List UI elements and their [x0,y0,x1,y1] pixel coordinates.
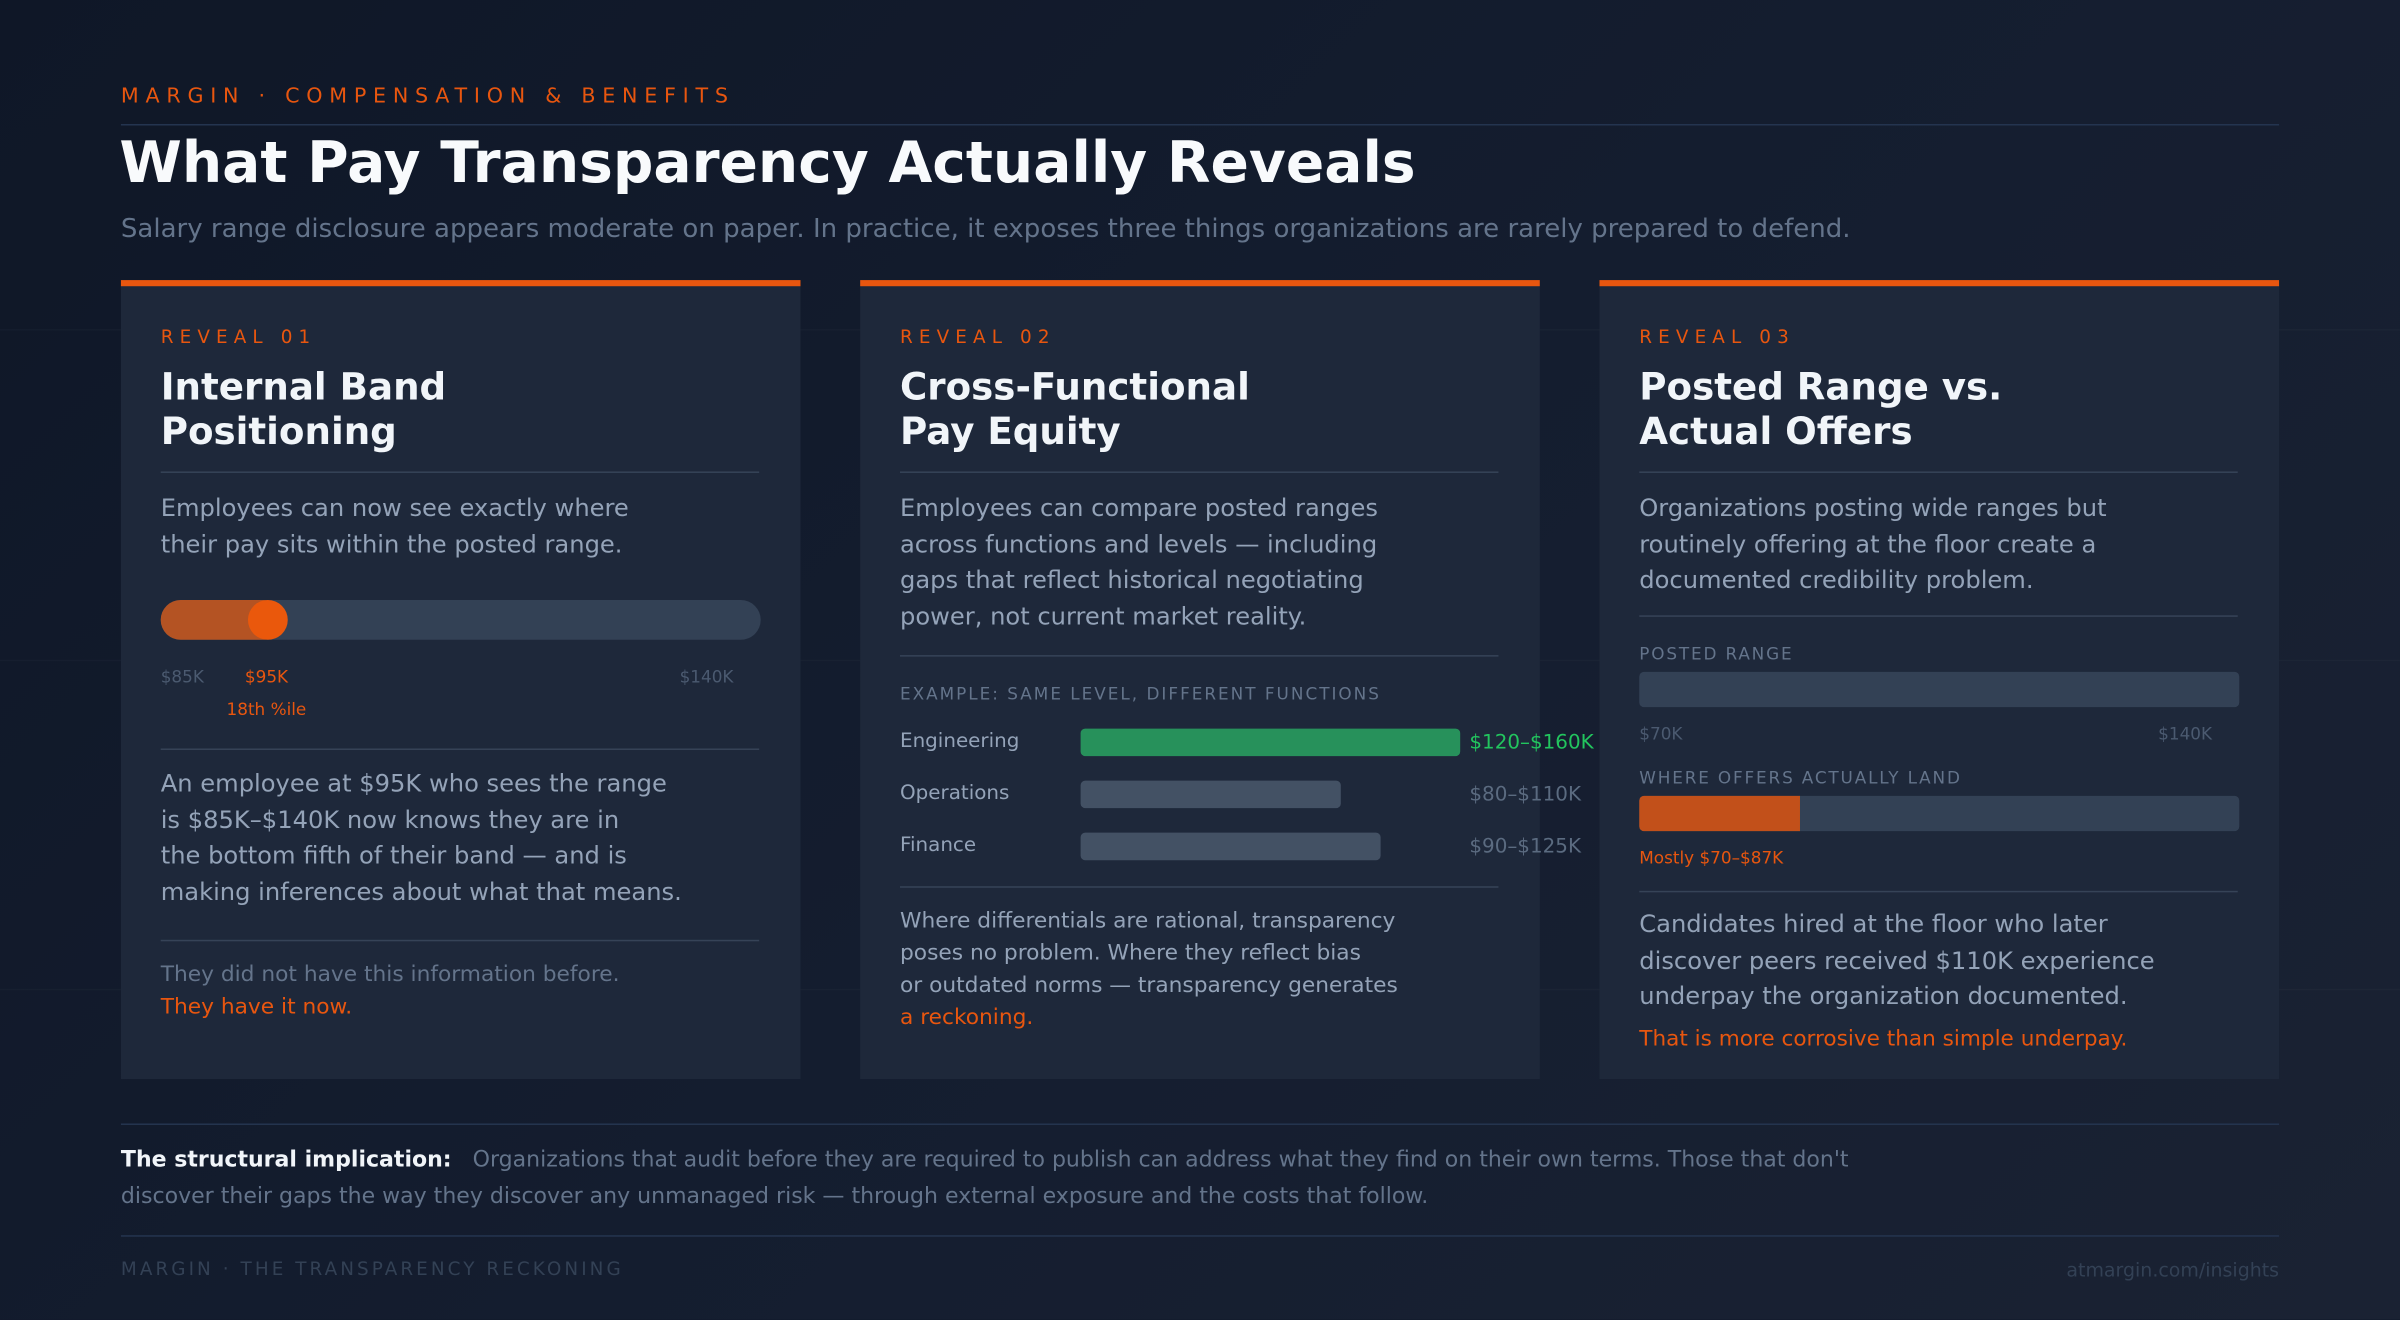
bar chart: functions: Operations [900,782,1009,805]
card title 1 [161,364,446,453]
panel: reveal 02: REVEAL 02 [900,326,1056,347]
body text 3: Organizations posting wide ranges but [1639,493,2107,522]
body text 2: gaps that reflect historical negotiating [900,565,1364,594]
panel: reveal 03 [1599,280,2279,1079]
body text 3b: Candidates hired at the floor who later [1639,909,2108,938]
structural implication: The structural implication: Organizations that audit before they are required to publish can address what they find on their own terms. Those that don't [121,1148,1849,1172]
posted range chart: $140K [2158,724,2212,744]
body text 3b [1639,909,2155,1010]
panel: reveal 03: Mostly $70–$87K [1639,848,1783,868]
bar chart: functions: Engineering [900,730,1019,753]
closing note 2: or outdated norms — transparency generates [900,973,1398,998]
body text 3b: discover peers received $110K experience [1639,945,2155,974]
card title 3: Actual Offers [1639,409,1913,453]
card title 3 [1639,364,2002,453]
posted range chart: $70K [1639,724,1682,744]
panel: reveal 01: 18th %ile [227,699,306,719]
panel: reveal 01: $95K [245,667,288,687]
posted range chart: WHERE OFFERS ACTUALLY LAND [1639,768,1962,788]
body text 1: Employees can now see exactly where [161,493,629,522]
closing note 1 [160,963,620,1019]
body text 3b: underpay the organization documented. [1639,981,2128,1010]
subtitle: Salary range disclosure appears moderate on paper. In practice, it exposes three things organizations are rarely prepared to defend. [121,214,1851,245]
panel: reveal 03: REVEAL 03 [1639,326,1795,347]
bar chart: functions: $90–$125K [1469,836,1581,859]
posted range chart [1639,644,2240,868]
body text 2: across functions and levels — including [900,529,1377,558]
bar chart: functions: EXAMPLE: SAME LEVEL, DIFFERENT FUNCTIONS [900,684,1381,704]
bar chart: functions: Finance [900,834,976,857]
card title 2 [900,364,1250,453]
panel: reveal 01 [121,280,801,1079]
closing note 1: They have it now. [161,995,352,1019]
body text 1b: is $85K–$140K now knows they are in [161,804,619,833]
body text 1b: An employee at $95K who sees the range [161,768,667,797]
card title 2: Pay Equity [900,409,1121,453]
body text 1b: the bottom fifth of their band — and is [161,840,627,869]
bar chart: functions: $120–$160K [1469,732,1594,755]
body text 3: documented credibility problem. [1639,565,2034,594]
footer right: atmargin.com/insights [2066,1258,2279,1281]
header label: MARGIN · COMPENSATION & BENEFITS [121,84,735,109]
closing note 3: That is more corrosive than simple underpay. [1639,1027,2127,1052]
bar chart: functions [900,684,1594,860]
body text 3 [1639,493,2107,594]
card title 1: Positioning [161,409,397,453]
range labels: $85K [161,667,204,687]
body text 2: Employees can compare posted ranges [900,493,1378,522]
structural implication [120,1148,1849,1208]
body text 3: routinely offering at the floor create a [1639,529,2096,558]
body text 1 [161,493,629,558]
closing note 2: Where differentials are rational, transparency [900,909,1395,934]
range bar chart [160,600,761,640]
closing note 2 [900,909,1398,1030]
body text 2: power, not current market reality. [900,601,1306,630]
panel: reveal 01: REVEAL 01 [161,326,316,347]
structural implication: discover their gaps the way they discover any unmanaged risk — through external exposure and the costs that follow. [121,1184,1428,1208]
footer left: MARGIN · THE TRANSPARENCY RECKONING [121,1258,624,1280]
closing note 2: poses no problem. Where they reflect bias [900,941,1361,966]
body text 1: their pay sits within the posted range. [161,529,622,558]
card title 2: Cross-Functional [900,364,1250,409]
title: What Pay Transparency Actually Reveals [119,130,1416,196]
panel: reveal 01: $140K [680,667,733,687]
card title 3: Posted Range vs. [1639,364,2002,409]
bar chart: functions: $80–$110K [1469,784,1581,807]
card title 1: Internal Band [161,364,446,409]
body text 1b: making inferences about what that means. [161,876,682,905]
body text 1b [161,768,682,905]
closing note 1: They did not have this information before. [161,963,620,987]
closing note 2: a reckoning. [900,1006,1033,1030]
panel: reveal 02 [860,280,1540,1079]
body text 2 [900,493,1378,630]
posted range chart: POSTED RANGE [1639,644,1793,664]
